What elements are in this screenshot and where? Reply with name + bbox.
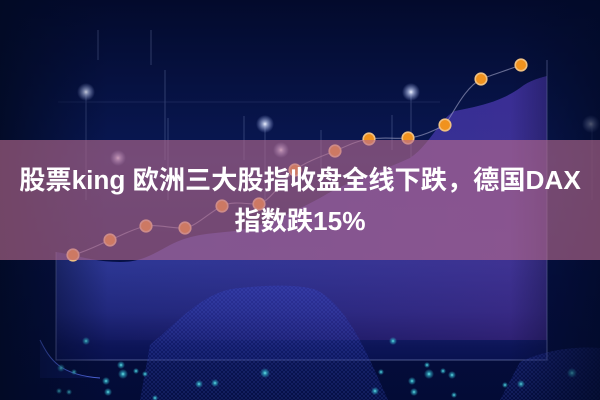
vertical light lines and glow nodes	[58, 30, 600, 200]
title: 指数跌15%	[234, 206, 365, 236]
chart frame	[56, 60, 547, 360]
teal particles	[56, 337, 577, 400]
mesh wave	[40, 286, 600, 400]
chart area	[56, 76, 547, 360]
title: 股票king 欧洲三大股指收盘全线下跌，德国DAX	[19, 165, 581, 195]
line chart with orange markers	[67, 59, 527, 261]
translucent title band	[0, 140, 600, 260]
title	[19, 165, 581, 236]
